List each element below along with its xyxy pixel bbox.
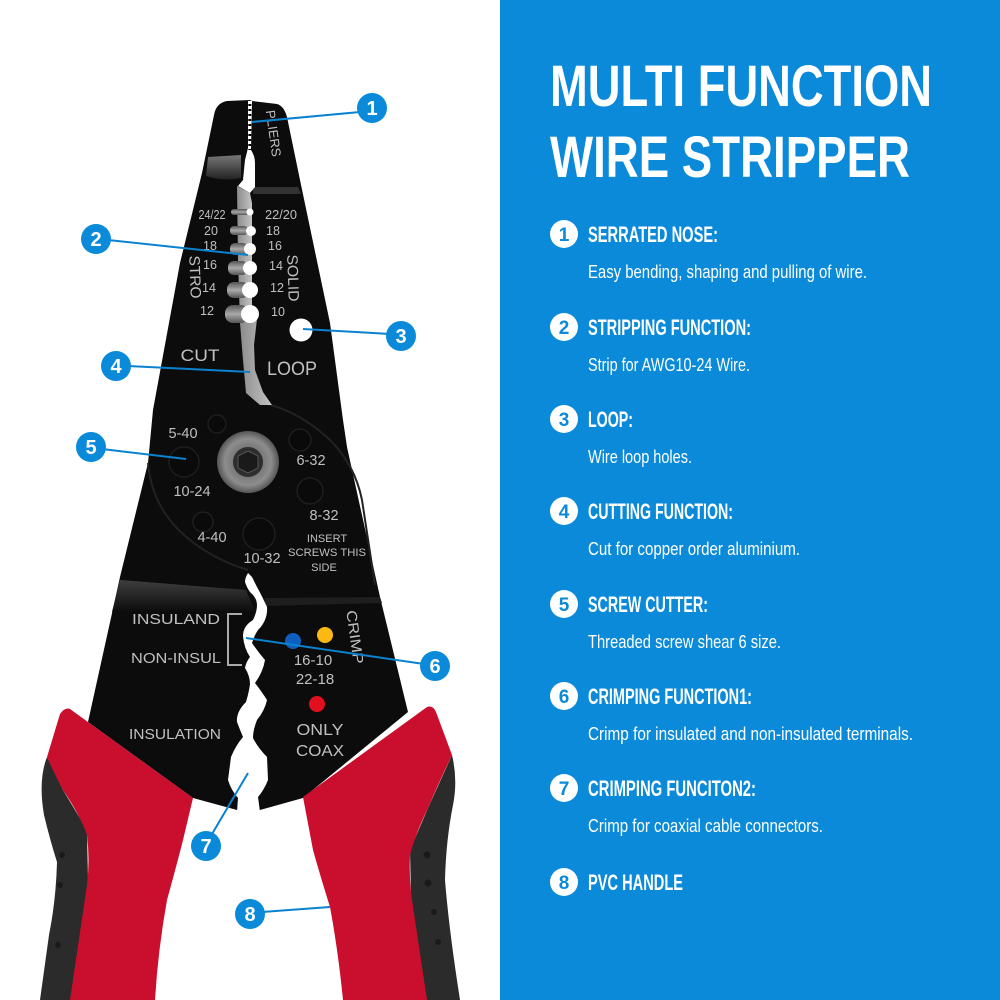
title: WIRE STRIPPER bbox=[550, 125, 910, 190]
callout 5: 5 bbox=[85, 437, 97, 459]
left red handle bbox=[47, 709, 193, 1000]
engraved labels: INSULATION bbox=[129, 727, 221, 743]
engraved labels: 10-32 bbox=[243, 551, 281, 567]
feature 7: crimping function 2 bbox=[550, 774, 823, 836]
feature 8: pvc handle: PVC HANDLE bbox=[588, 870, 683, 895]
engraved labels: 14 bbox=[202, 281, 216, 295]
engraved labels: 16 bbox=[268, 239, 282, 253]
engraved labels: COAX bbox=[296, 743, 344, 760]
engraved labels: 22/20 bbox=[265, 208, 297, 222]
feature 5: screw cutter: SCREW CUTTER: bbox=[588, 592, 708, 617]
feature 8: pvc handle bbox=[550, 868, 683, 896]
lower left highlight bbox=[112, 580, 255, 612]
feature 8: pvc handle: 8 bbox=[559, 873, 569, 894]
engraved labels bbox=[129, 109, 366, 760]
callout 7: 7 bbox=[200, 836, 212, 858]
title bbox=[550, 54, 932, 190]
feature 7: crimping function 2: 7 bbox=[559, 779, 569, 800]
engraved labels: 6-32 bbox=[296, 453, 326, 469]
engraved labels: 12 bbox=[270, 281, 284, 295]
engraved labels: SIDE bbox=[311, 562, 337, 574]
engraved labels: 20 bbox=[204, 224, 218, 238]
feature 6: crimping function 1: 6 bbox=[559, 687, 569, 708]
feature 5: screw cutter: Threaded screw shear 6 size. bbox=[588, 631, 781, 652]
callout 2: 2 bbox=[90, 229, 102, 251]
wire stripper illustration bbox=[40, 100, 460, 1000]
feature 5: screw cutter: 5 bbox=[559, 595, 570, 616]
yellow terminal dot bbox=[317, 627, 333, 643]
engraved labels: 18 bbox=[266, 224, 280, 238]
engraved labels: INSULAND bbox=[132, 612, 220, 628]
callout 3: 3 bbox=[395, 326, 407, 348]
engraved labels: 18 bbox=[203, 239, 217, 253]
pivot plate outline bbox=[148, 404, 375, 585]
callout 4: 4 bbox=[110, 356, 122, 378]
feature 5: screw cutter bbox=[550, 590, 781, 652]
feature 3: loop bbox=[550, 405, 692, 467]
feature 4: cutting function: 4 bbox=[559, 502, 570, 523]
engraved labels: 22-18 bbox=[296, 671, 334, 688]
feature 2: stripping function bbox=[550, 313, 751, 375]
engraved labels: 5-40 bbox=[168, 426, 198, 442]
engraved labels: 16 bbox=[203, 258, 217, 272]
feature 3: loop: LOOP: bbox=[588, 407, 633, 432]
feature 6: crimping function 1: CRIMPING FUNCTION1: bbox=[588, 684, 752, 709]
callout 7 bbox=[191, 773, 248, 861]
engraved labels: 10-24 bbox=[173, 484, 211, 500]
grip dimples bbox=[55, 852, 441, 948]
feature 2: stripping function: STRIPPING FUNCTION: bbox=[588, 315, 751, 340]
engraved labels: 8-32 bbox=[309, 508, 339, 524]
callout 3 bbox=[303, 321, 416, 351]
callout 4 bbox=[101, 351, 250, 381]
engraved labels: ONLY bbox=[296, 722, 344, 739]
right handle grip bbox=[410, 755, 460, 1000]
callout 5 bbox=[76, 432, 186, 462]
right jaw highlight bbox=[253, 187, 301, 194]
crimp jaw gap bbox=[228, 573, 268, 812]
blue terminal dot bbox=[285, 633, 301, 649]
feature 4: cutting function bbox=[550, 497, 800, 559]
engraved labels: 14 bbox=[269, 259, 283, 273]
engraved labels: PLIERS bbox=[263, 109, 284, 158]
engraved labels: 4-40 bbox=[197, 530, 227, 546]
loop hole bbox=[290, 318, 312, 342]
feature 2: stripping function: Strip for AWG10-24 Wire. bbox=[588, 354, 750, 375]
bracket bbox=[228, 614, 242, 665]
pivot screw bbox=[217, 431, 279, 493]
serrations bbox=[248, 104, 251, 150]
plier body bbox=[88, 100, 408, 810]
engraved labels: SCREWS THIS bbox=[288, 547, 366, 559]
right red handle bbox=[303, 707, 452, 1000]
feature 7: crimping function 2: CRIMPING FUNCITON2: bbox=[588, 776, 756, 801]
engraved labels: LOOP bbox=[267, 359, 317, 380]
engraved labels: SOLID bbox=[283, 254, 302, 302]
left handle grip bbox=[40, 757, 88, 1000]
engraved labels: 12 bbox=[200, 304, 214, 318]
feature 1: serrated nose bbox=[550, 220, 867, 282]
feature 7: crimping function 2: Crimp for coaxial cable connectors. bbox=[588, 815, 823, 836]
callout 8 bbox=[235, 899, 330, 929]
stripping teeth bbox=[225, 208, 259, 323]
feature 6: crimping function 1: Crimp for insulated and non-insulated terminals. bbox=[588, 723, 913, 744]
callout 1 bbox=[252, 93, 387, 123]
screw holes bbox=[169, 415, 323, 550]
engraved labels: 10 bbox=[271, 305, 285, 319]
engraved labels: 24/22 bbox=[198, 208, 226, 222]
engraved labels: 16-10 bbox=[294, 652, 332, 669]
engraved labels: CRIMP bbox=[342, 609, 366, 665]
feature 3: loop: 3 bbox=[559, 410, 569, 431]
feature 4: cutting function: CUTTING FUNCTION: bbox=[588, 499, 733, 524]
callout 6: 6 bbox=[429, 656, 441, 678]
feature 2: stripping function: 2 bbox=[559, 318, 569, 339]
lower right highlight bbox=[265, 597, 382, 606]
engraved labels: CUT bbox=[180, 346, 220, 365]
cutting blade bbox=[240, 319, 272, 405]
feature 4: cutting function: Cut for copper order aluminium. bbox=[588, 538, 800, 559]
feature 1: serrated nose: Easy bending, shaping and pulling of wire. bbox=[588, 261, 867, 282]
callout 8: 8 bbox=[244, 904, 256, 926]
engraved labels: STRO bbox=[185, 255, 204, 299]
engraved labels: NON-INSUL bbox=[131, 651, 221, 667]
callout 1: 1 bbox=[366, 98, 378, 120]
serrated slot bbox=[238, 101, 255, 193]
red terminal dot bbox=[309, 696, 325, 712]
callout 6 bbox=[246, 638, 450, 681]
feature 3: loop: Wire loop holes. bbox=[588, 446, 692, 467]
feature 1: serrated nose: 1 bbox=[559, 225, 570, 246]
callout 2 bbox=[81, 224, 248, 255]
nose highlight bbox=[206, 155, 241, 180]
stripping blade bbox=[237, 186, 252, 322]
engraved labels: INSERT bbox=[307, 533, 347, 545]
feature 1: serrated nose: SERRATED NOSE: bbox=[588, 222, 718, 247]
feature 6: crimping function 1 bbox=[550, 682, 913, 744]
blue panel bbox=[500, 0, 1000, 1000]
